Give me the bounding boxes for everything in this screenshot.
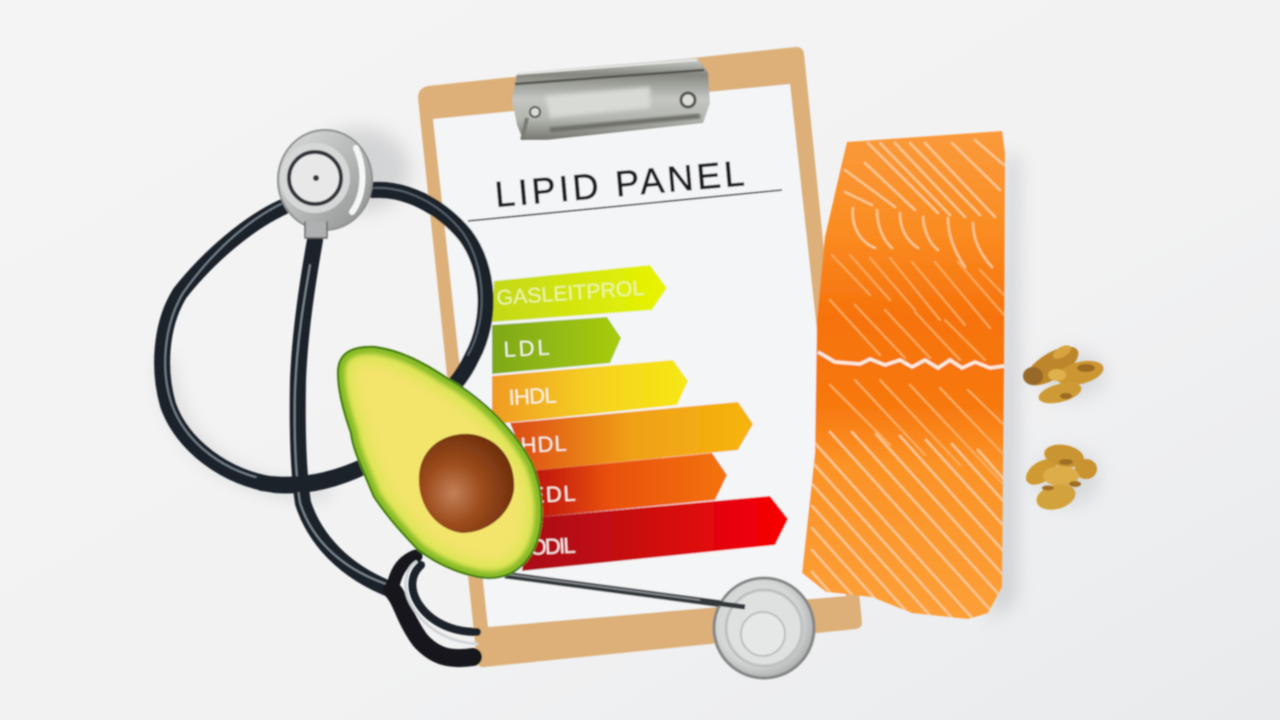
- bar 5: [529, 453, 727, 518]
- bar 3: IHDL: [508, 383, 557, 410]
- salmon fat stripes: [810, 138, 1006, 619]
- object shadows: [165, 128, 1106, 622]
- tube: left loop: [162, 204, 365, 486]
- bar 5: EDL: [529, 481, 576, 508]
- avocado pit: [419, 434, 514, 533]
- walnut bottom: [1021, 442, 1097, 514]
- lower rod: [505, 574, 745, 607]
- bar 4: [510, 402, 753, 471]
- stethoscope: [162, 130, 814, 678]
- paper sheet: [433, 84, 846, 627]
- tube: stem to yoke: [295, 240, 392, 590]
- title rule: [468, 190, 782, 221]
- salmon fillet: [801, 130, 1006, 620]
- chest piece bottom: [714, 578, 814, 678]
- chest piece top: [278, 130, 372, 238]
- rod tip: [700, 601, 745, 607]
- salmon fat band: [818, 352, 1004, 368]
- avocado: [330, 340, 550, 585]
- bar 2: LDL: [503, 335, 550, 362]
- metal clip: [512, 58, 710, 140]
- bar 1: GASLEITPROL: [496, 277, 645, 310]
- title: LIPID PANEL: [493, 152, 746, 215]
- bar 4: HDL: [520, 431, 567, 458]
- avocado skin and flesh: [330, 340, 550, 585]
- salmon body: [802, 131, 1005, 619]
- bar 3: [492, 360, 688, 423]
- left loop crossing over stem: [262, 466, 365, 485]
- bar 1: [492, 265, 667, 322]
- colored lipid bar chart: [492, 265, 788, 571]
- bar 6: ODIL: [529, 533, 576, 560]
- bar 2: [492, 317, 621, 374]
- clipboard board: [418, 47, 862, 667]
- main artwork: [162, 47, 1106, 678]
- walnut top: [1020, 339, 1106, 407]
- yoke and ear tubes: [392, 556, 477, 658]
- clipboard: [418, 47, 862, 667]
- bar 6: [522, 496, 788, 571]
- tube: right loop: [373, 188, 486, 384]
